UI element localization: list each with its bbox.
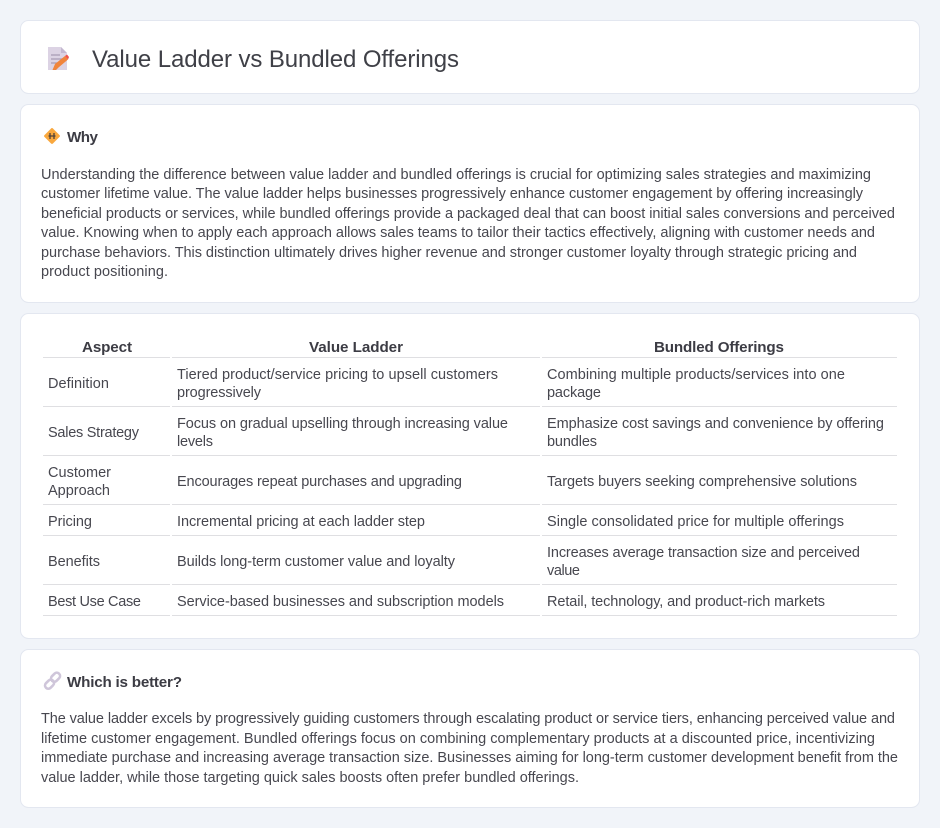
table header row: Value Ladder <box>309 339 403 356</box>
row: sales strategy: Emphasize cost savings and convenience by offering <box>547 416 884 432</box>
row: best use case: Service-based businesses and subscription models <box>177 594 504 610</box>
row: definition: Tiered product/service pricing to upsell customers <box>177 367 498 383</box>
row: definition: progressively <box>177 385 262 401</box>
icon: document with pencil <box>48 47 69 70</box>
text block: why paragraph: beneficial products or services, while bundled offerings provide a packaged deal that can boost initial sales conversions and perceived <box>41 206 895 222</box>
row: benefits: Builds long-term customer value and loyalty <box>177 554 456 570</box>
text block: why paragraph: Understanding the difference between value ladder and bundled offerings is crucial for optimizing sales strategies and maximizing <box>41 167 871 183</box>
panel: title header <box>20 20 920 94</box>
row: sales strategy <box>48 416 884 450</box>
row: best use case: Best Use Case <box>48 594 141 610</box>
row: best use case: Retail, technology, and product-rich markets <box>547 594 825 610</box>
text block: why paragraph: value. Knowing when to apply each approach allows sales teams to tailor their tactics effectively, aligning with customer needs and <box>41 225 875 241</box>
text block: which is better paragraph: lifetime customer engagement. Bundled offerings focus on combining complementary products at a discounted price, incentivizing <box>41 731 875 747</box>
row: pricing: Pricing <box>48 514 92 530</box>
text block: which is better paragraph <box>41 711 898 786</box>
row: definition <box>48 367 845 401</box>
row: customer approach: Encourages repeat purchases and upgrading <box>177 474 462 490</box>
heading: which is better: Which is better? <box>67 674 182 691</box>
row: benefits: Increases average transaction size and perceived <box>547 545 860 561</box>
row: customer approach: Approach <box>48 483 110 499</box>
icon: warning diamond <box>44 128 60 144</box>
row: sales strategy: Sales Strategy <box>48 425 140 441</box>
row: customer approach: Targets buyers seeking comprehensive solutions <box>547 474 857 490</box>
row: sales strategy: levels <box>177 434 213 450</box>
row: best use case <box>48 594 825 610</box>
row: definition: Definition <box>48 376 109 392</box>
panel: comparison table <box>20 314 920 638</box>
table header row <box>82 339 784 356</box>
row: sales strategy: Focus on gradual upselling through increasing value <box>177 416 508 432</box>
panel: why <box>20 104 920 302</box>
icon: chain link <box>44 671 61 690</box>
heading: why: Why <box>67 129 99 146</box>
row: definition: Combining multiple products/services into one <box>547 367 845 383</box>
text block: why paragraph: customer lifetime value. The value ladder helps businesses progressively enhance customer engagement by offering increasingly <box>41 186 864 202</box>
text block: why paragraph <box>41 167 895 280</box>
row: customer approach: Customer <box>48 465 111 481</box>
row: pricing: Single consolidated price for multiple offerings <box>547 514 844 530</box>
row: benefits <box>48 545 860 579</box>
row: benefits: value <box>547 563 580 579</box>
row: sales strategy: bundles <box>547 434 597 450</box>
row: pricing <box>48 514 844 530</box>
panel: which is better <box>20 650 920 808</box>
table header row: Aspect <box>82 339 132 356</box>
text block: which is better paragraph: immediate purchase and increasing average transaction size. Businesses aiming for long-term customer development benefit from the <box>41 750 898 766</box>
text block: which is better paragraph: value ladder, while those targeting quick sales boosts often prefer bundled offerings. <box>41 770 579 786</box>
row: definition: package <box>547 385 601 401</box>
row: pricing: Incremental pricing at each ladder step <box>177 514 425 530</box>
row: benefits: Benefits <box>48 554 100 570</box>
text block: why paragraph: purchase behaviors. This distinction ultimately drives higher revenue and stronger customer loyalty through strategic pricing and <box>41 245 857 261</box>
table header row: Bundled Offerings <box>654 339 784 356</box>
row: customer approach <box>48 465 857 499</box>
text block: why paragraph: product positioning. <box>41 264 168 280</box>
text block: which is better paragraph: The value ladder excels by progressively guiding customers through escalating product or service tiers, enhancing perceived value and <box>41 711 895 727</box>
title: Value Ladder vs Bundled Offerings <box>92 46 459 73</box>
